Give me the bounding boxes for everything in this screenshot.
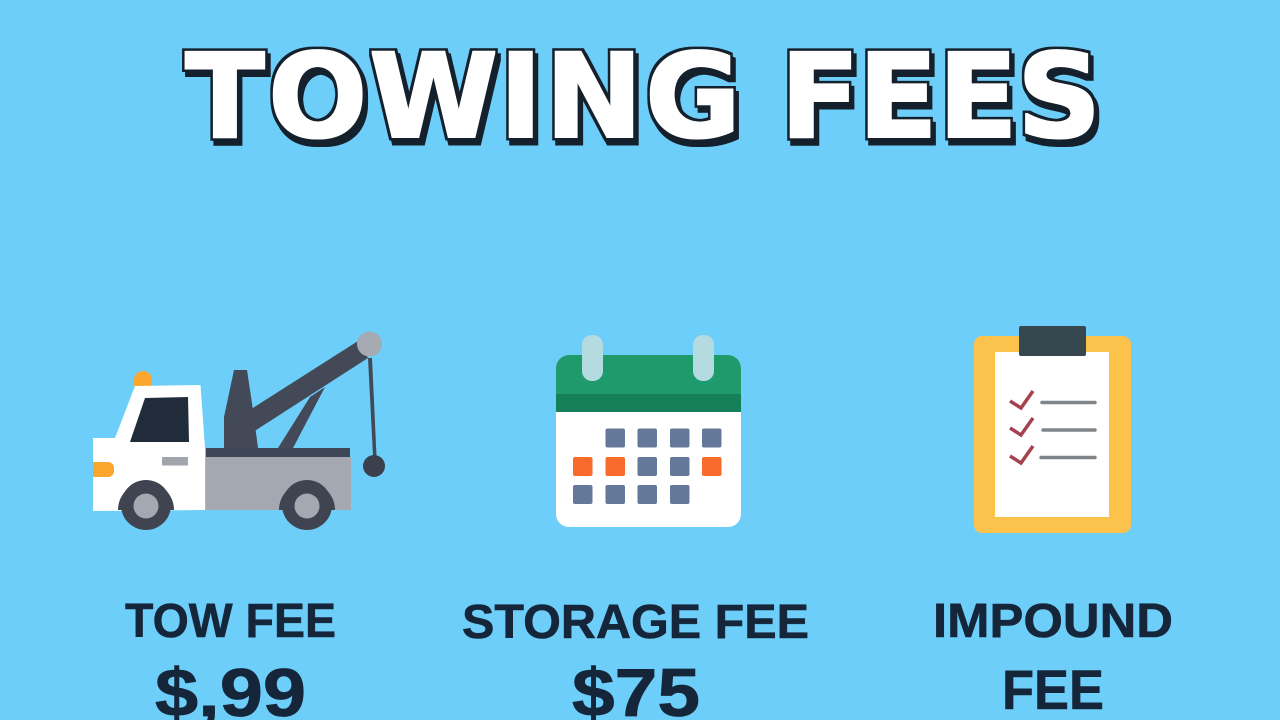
icon: clipboard checklist — [974, 326, 1131, 533]
title: TOWING FEES — [185, 28, 1101, 165]
icon: calendar — [556, 335, 741, 527]
label: tow fee: TOW FEE — [125, 595, 336, 648]
label: storage fee: STORAGE FEE — [462, 596, 809, 649]
label: impound: IMPOUND — [933, 595, 1173, 648]
label: impound fee second line: FEE — [1002, 658, 1104, 720]
icon: tow truck — [93, 332, 385, 530]
